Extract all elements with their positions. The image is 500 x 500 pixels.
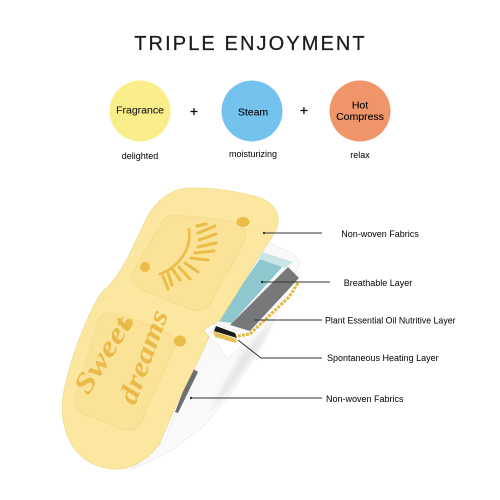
caption: delighted: delighted <box>122 151 158 161</box>
breathable layer <box>217 256 284 323</box>
title: TRIPLE ENJOYMENT <box>134 33 367 55</box>
caption: moisturizing: moisturizing <box>229 149 277 159</box>
yellow mask body <box>62 188 278 469</box>
circle: hot compress: Compress <box>336 111 384 123</box>
label: Plant Essential Oil Nutritive Layer: Plant Essential Oil Nutritive Layer <box>325 316 456 326</box>
soft shadow on backing <box>208 312 278 414</box>
text: Sweet dreams: dreams <box>112 306 174 408</box>
lower grey layer <box>175 368 198 413</box>
text: Sweet dreams: Sweet <box>68 311 139 400</box>
circle: fragrance <box>110 80 170 142</box>
caption: relax: relax <box>350 150 370 160</box>
icon: closed eye with lashes <box>160 224 216 289</box>
leader line: non-woven bottom <box>190 397 322 399</box>
label: Breathable Layer: Breathable Layer <box>344 278 412 288</box>
label: Non-woven Fabrics: Non-woven Fabrics <box>326 394 404 404</box>
dots <box>236 217 250 227</box>
heating layer beads <box>238 283 298 336</box>
leader line: non-woven top <box>263 232 322 234</box>
white backing layer <box>130 243 300 470</box>
lower embossed square <box>75 313 175 430</box>
leader line: breathable <box>261 281 330 283</box>
spontaneous heating layer edge <box>214 326 237 338</box>
circle: hot compress <box>330 80 390 142</box>
circle: fragrance: Fragrance <box>116 104 164 116</box>
upper embossed square <box>132 216 246 310</box>
label: Spontaneous Heating Layer: Spontaneous Heating Layer <box>327 353 439 363</box>
label: Non-woven Fabrics: Non-woven Fabrics <box>341 229 419 239</box>
leader line: oil layer <box>254 319 322 321</box>
circle: hot compress: Hot <box>352 100 368 112</box>
plus sign: + <box>190 103 198 119</box>
leader line: heating layer <box>238 340 322 358</box>
circle: steam <box>222 80 282 142</box>
oil nutritive layer <box>230 267 299 331</box>
circle: steam: Steam <box>238 106 268 118</box>
eye mask layered illustration <box>62 188 300 470</box>
white tab <box>209 326 248 359</box>
plus sign: + <box>300 102 308 118</box>
text: Sweet dreams <box>68 306 174 408</box>
